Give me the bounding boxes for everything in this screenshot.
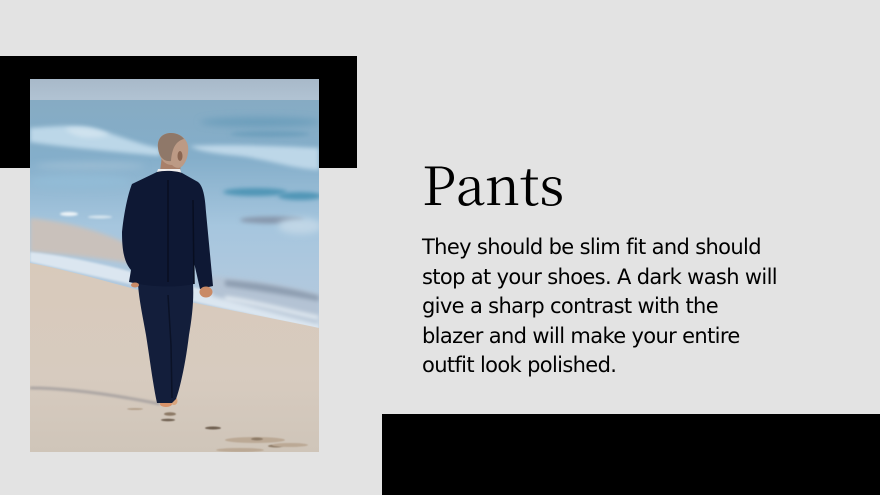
body text: blazer and will make your entire xyxy=(422,324,740,348)
wet sand patch xyxy=(30,218,135,264)
head xyxy=(158,133,188,168)
neck and collar xyxy=(160,155,182,172)
body text: They should be slim fit and should xyxy=(422,235,761,259)
black rectangle bottom right xyxy=(382,414,880,495)
body text: give a sharp contrast with the xyxy=(422,294,718,318)
sky xyxy=(30,79,319,103)
sea xyxy=(30,100,319,330)
footprints xyxy=(127,408,308,452)
trousers xyxy=(138,284,193,403)
black rectangle behind photo xyxy=(0,56,357,168)
hands xyxy=(200,286,212,298)
title: Pants xyxy=(422,145,564,221)
body text: stop at your shoes. A dark wash will xyxy=(422,264,777,288)
waves xyxy=(30,117,322,234)
feet xyxy=(160,401,172,407)
photo: man in a navy suit walking on the beach xyxy=(30,79,319,452)
shadow line on sand xyxy=(30,388,160,404)
body text xyxy=(422,235,777,377)
dry sand xyxy=(30,263,319,452)
wave foam xyxy=(30,252,319,330)
man xyxy=(122,133,213,407)
suit jacket xyxy=(122,171,213,289)
body text: outfit look polished. xyxy=(422,353,616,377)
